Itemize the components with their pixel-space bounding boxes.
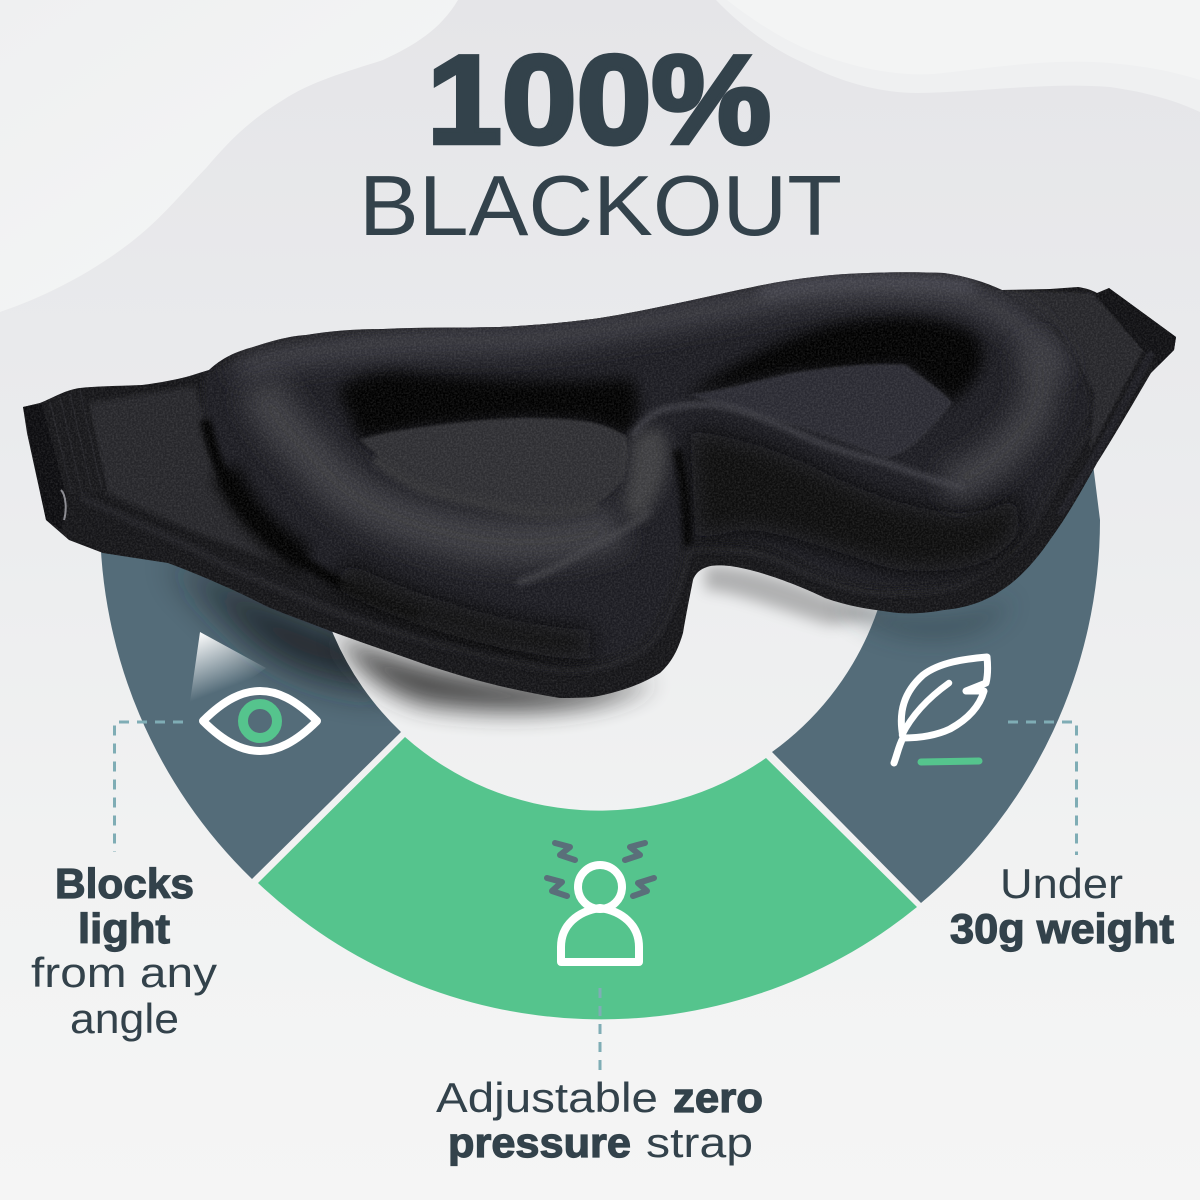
right rim highlight: [945, 345, 1040, 485]
strap ribs: [50, 391, 102, 494]
mask shadow: [170, 560, 1010, 711]
nose crease: [677, 450, 688, 545]
eye iris: [243, 704, 277, 738]
segment: zero pressure: [258, 737, 917, 1019]
pressure marks: [547, 843, 654, 896]
strap buckle: [61, 490, 66, 520]
background blob: top left: [0, 0, 458, 312]
front rim lower shade: [340, 575, 590, 645]
dashed leader: bottom: [598, 988, 602, 1075]
strap outer dark side: [23, 404, 66, 530]
caption: adjustable zero pressure strap: Adjustable: [436, 1074, 658, 1121]
caption: adjustable zero pressure strap: strap: [646, 1119, 753, 1166]
feather underline: [921, 761, 979, 762]
right lip edge: [1060, 352, 1152, 515]
caption: adjustable zero pressure strap: pressure: [448, 1119, 631, 1166]
background blob: top right outer: [716, 0, 1200, 112]
shadow on left segment: [170, 560, 395, 690]
top edge lightness: [760, 280, 975, 292]
caption: blocks light: light: [78, 905, 170, 952]
right flap: [1005, 291, 1143, 450]
icon: stressed person: [547, 843, 654, 962]
caption: blocks light: from any: [31, 949, 217, 996]
title: [359, 29, 842, 254]
person head: [578, 865, 622, 909]
foam top highlight: [235, 288, 1060, 375]
segment: under 30g: [772, 440, 1100, 903]
caption: under 30g weight: [950, 860, 1174, 952]
left bowl rim arc: [517, 510, 650, 583]
caption: blocks light: Blocks: [55, 860, 194, 907]
nose pad lightness: [624, 428, 668, 521]
right elastic strap: [1108, 288, 1176, 365]
lower left dark crease: [205, 420, 420, 615]
headline: BLACKOUT: BLACKOUT: [359, 159, 842, 254]
left flap: [89, 386, 282, 562]
light glint triangle: [190, 632, 266, 702]
left recess dark wall: [338, 372, 639, 440]
left recess floor: [360, 418, 627, 512]
caption: adjustable zero pressure strap: zero: [673, 1074, 763, 1121]
shadow under nose bridge: [705, 565, 890, 625]
caption: under 30g weight: 30g weight: [950, 905, 1174, 952]
feather vein: [902, 683, 949, 735]
right cheek dark: [690, 430, 1020, 571]
shadow under mask on centre: [335, 635, 655, 711]
caption: blocks light: angle: [70, 995, 179, 1042]
lower lip crest: [80, 427, 1090, 670]
background blob: top right inner: [727, 0, 1200, 80]
left rim highlight: [260, 385, 620, 542]
caption: under 30g weight: Under: [1000, 860, 1123, 907]
brow ridge highlight: [632, 404, 964, 488]
right recess floor: [690, 364, 952, 457]
sleep mask product photo: [23, 272, 1176, 698]
shadow on right segment: [840, 600, 1010, 638]
segment: blocks light: [100, 520, 401, 879]
headline: 100%: 100%: [427, 29, 771, 170]
right recess dark wall: [685, 317, 983, 403]
ring chart with three segments: [100, 440, 1100, 1019]
icon: feather: [894, 657, 988, 763]
icon: eye: [203, 691, 317, 751]
caption: blocks light: [31, 860, 217, 1042]
left elastic strap: [23, 388, 107, 497]
person body: [561, 908, 639, 962]
caption: adjustable zero pressure strap: [436, 1074, 763, 1166]
fabric texture: [24, 272, 1176, 698]
foam body: [202, 278, 1092, 662]
dashed leader: left: [114, 722, 183, 852]
dashed leader: right: [1008, 722, 1076, 855]
floor lower edge blend: [375, 458, 597, 513]
crease dark bloom: [225, 470, 305, 560]
